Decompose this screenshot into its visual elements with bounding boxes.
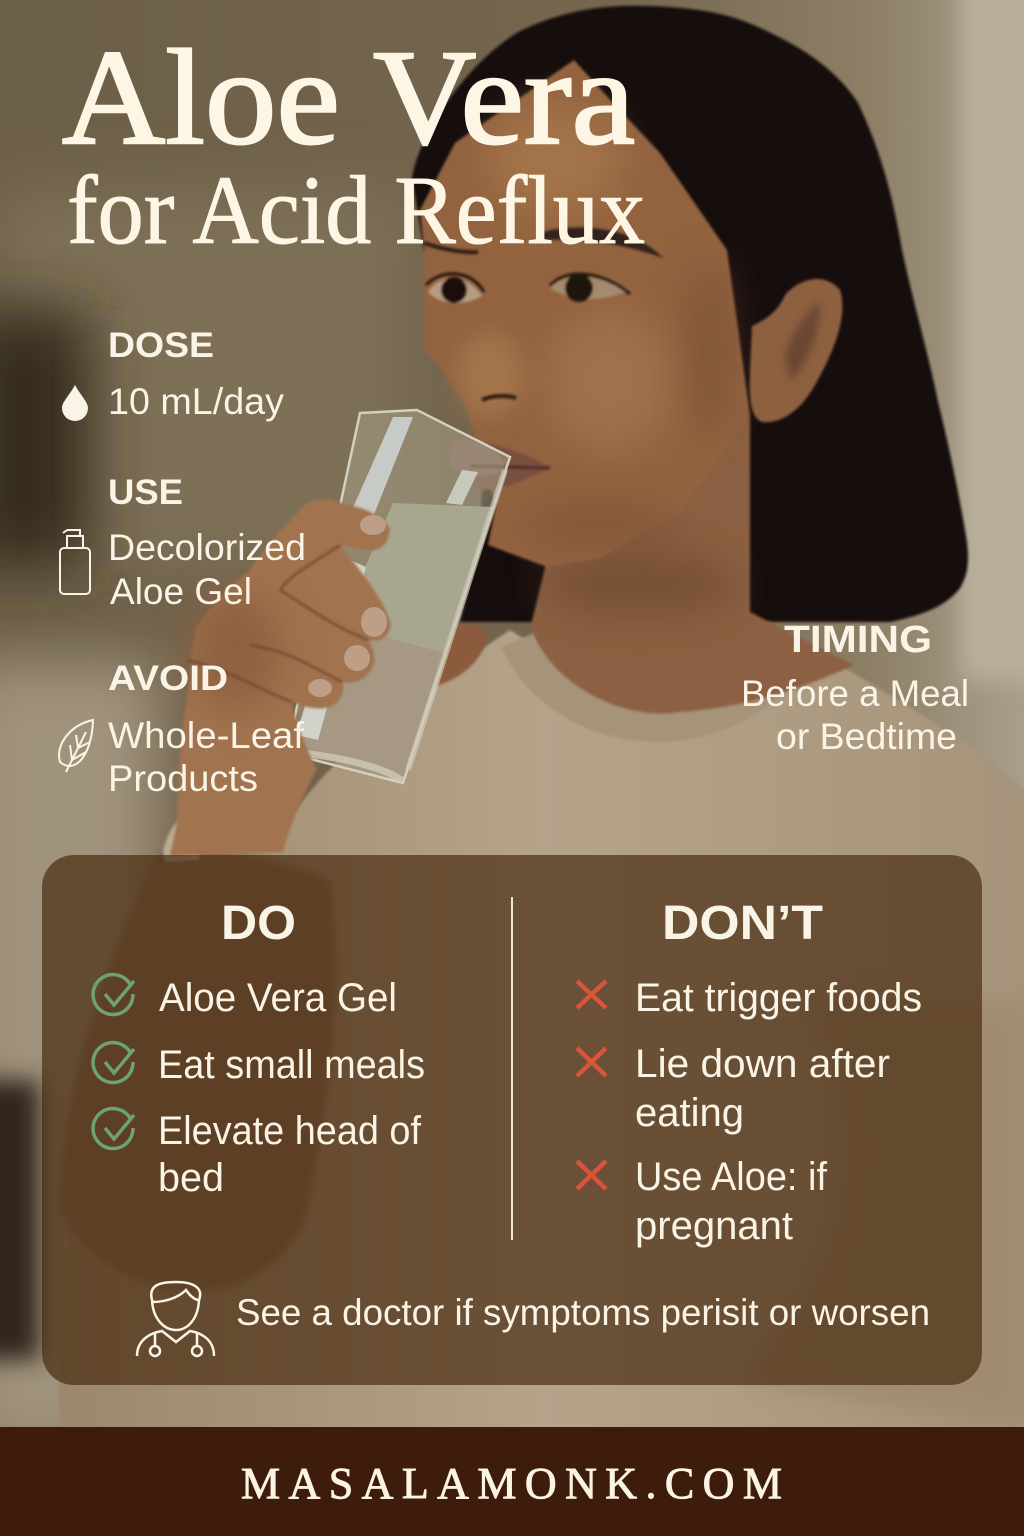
- doctor note: [137, 1282, 930, 1356]
- do column: Aloe Vera Gel: [159, 976, 397, 1020]
- panel: do and don't: [42, 855, 982, 1385]
- sweater: [58, 630, 1024, 1430]
- don't column: DON’T: [662, 897, 823, 950]
- icon: check 2: [93, 1043, 134, 1083]
- avoid block: [59, 659, 305, 799]
- use block: Decolorized: [108, 527, 306, 568]
- timing block: [741, 619, 969, 757]
- glass of water: [287, 410, 510, 783]
- icon: leaf: [59, 720, 93, 772]
- don't column: eating: [635, 1091, 744, 1135]
- lips: [452, 442, 551, 490]
- avoid block: AVOID: [108, 659, 228, 698]
- hand: [170, 500, 391, 856]
- icon: cross 1: [577, 981, 606, 1008]
- icon: cross 2: [577, 1048, 606, 1076]
- timing block: TIMING: [784, 619, 932, 661]
- ear: [750, 279, 842, 422]
- icon: cross 3: [577, 1161, 606, 1189]
- icon: water drop: [62, 385, 88, 421]
- cuff: [163, 815, 200, 862]
- dose block: DOSE: [108, 326, 214, 365]
- don't column: Eat trigger foods: [635, 976, 922, 1020]
- title: for Acid Reflux: [67, 157, 645, 264]
- thumb behind glass: [436, 624, 488, 686]
- use block: USE: [108, 473, 183, 512]
- face: [420, 60, 750, 567]
- icon: check 3: [93, 1109, 134, 1149]
- timing block: or Bedtime: [776, 716, 957, 757]
- don't column: Lie down after: [635, 1042, 890, 1086]
- do column: [93, 897, 425, 1200]
- don't column: Use Aloe: if: [635, 1155, 828, 1199]
- do column: Eat small meals: [158, 1043, 425, 1087]
- title: Aloe Vera: [62, 23, 635, 173]
- timing block: Before a Meal: [741, 673, 969, 714]
- don't column: pregnant: [635, 1204, 793, 1248]
- doctor note: See a doctor if symptoms perisit or worsen: [236, 1292, 930, 1333]
- collar: [518, 640, 792, 724]
- sleeve: [58, 830, 335, 1291]
- icon: check 1: [93, 975, 134, 1015]
- use block: [60, 473, 306, 612]
- don't column: [577, 897, 922, 1248]
- icon: doctor: [137, 1282, 214, 1356]
- do column: Elevate head of: [158, 1109, 422, 1153]
- avoid block: Whole-Leaf: [108, 715, 305, 756]
- use block: Aloe Gel: [110, 571, 252, 612]
- avoid block: Products: [108, 758, 258, 799]
- dose block: [62, 326, 284, 422]
- face shading: [458, 105, 730, 545]
- title: [62, 23, 645, 264]
- footer band: [0, 1427, 1024, 1536]
- do column: DO: [221, 897, 296, 950]
- dose block: 10 mL/day: [108, 381, 284, 422]
- do column: bed: [158, 1156, 224, 1200]
- neck: [531, 415, 854, 713]
- hair: [412, 6, 968, 622]
- icon: bottle: [60, 530, 90, 594]
- footer band: MASALAMONK.COM: [241, 1459, 782, 1508]
- eyes and brows: [424, 228, 663, 303]
